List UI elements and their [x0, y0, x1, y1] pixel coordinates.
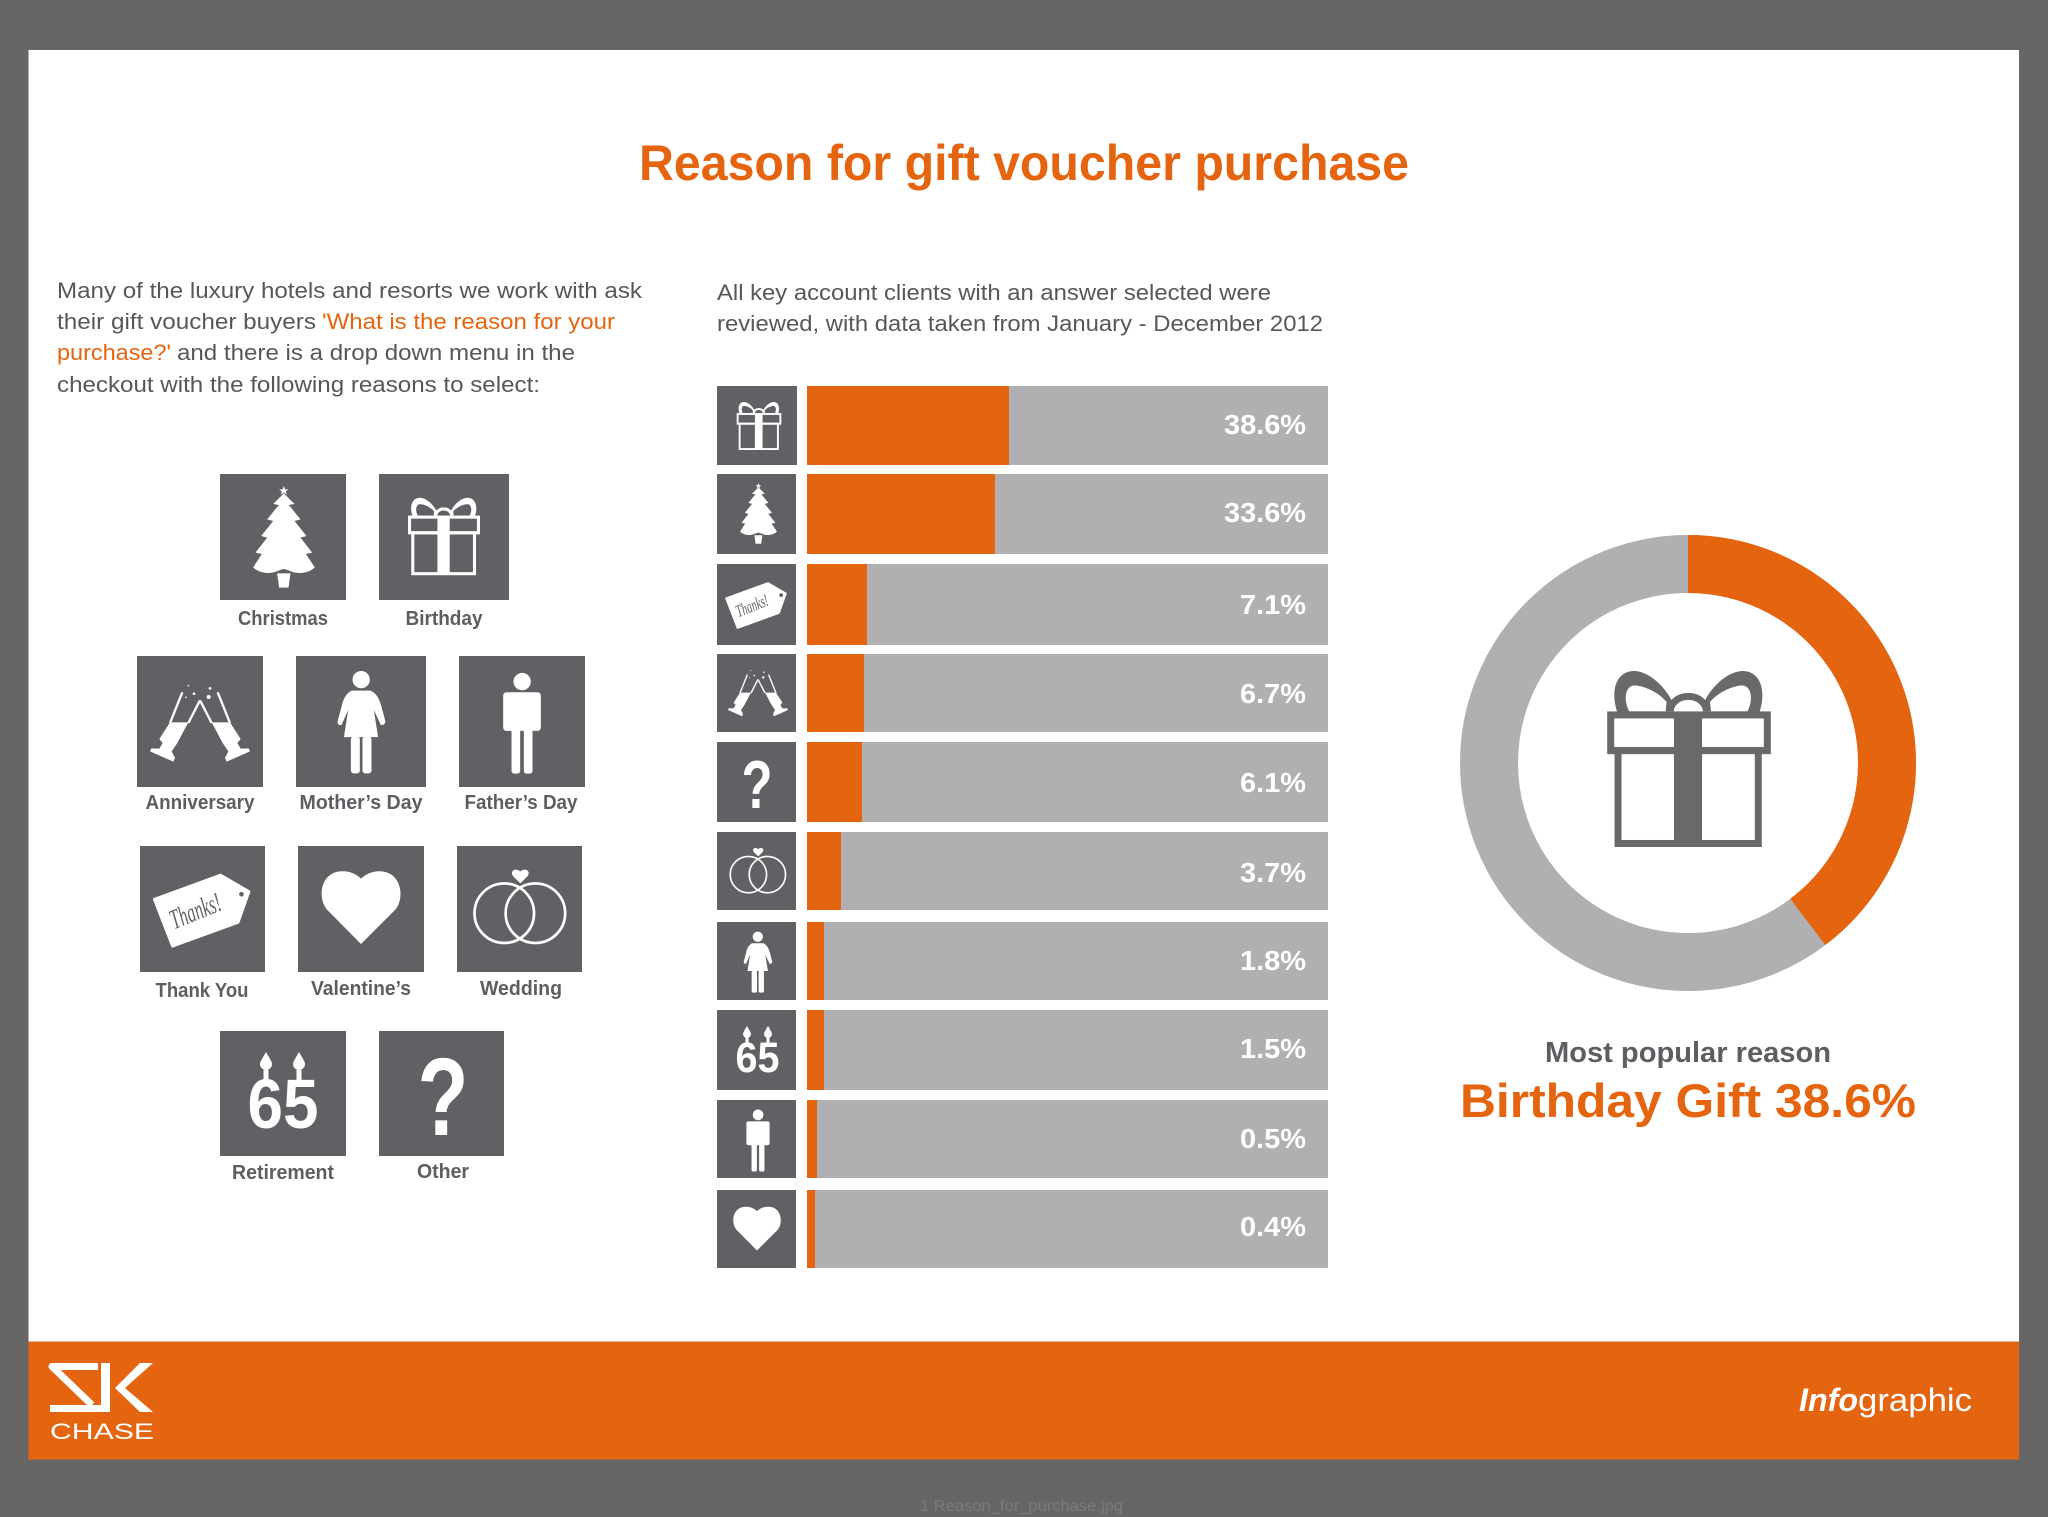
row: Other 6.1%: [717, 742, 1328, 823]
bar chart: [717, 386, 1328, 1268]
icon: gift: [1611, 671, 1767, 845]
icon: Thank You: [140, 846, 265, 1002]
icon: Valentine's: Valentine’s: [311, 978, 411, 1000]
row: Christmas 33.6%: [717, 474, 1328, 554]
row: Other 6.1%: ?: [742, 747, 772, 823]
icon: Birthday: Birthday: [406, 608, 483, 630]
footer label: Infographic: [1799, 1382, 1972, 1418]
callout: most popular reason: Birthday Gift 38.6%: [1460, 1074, 1916, 1127]
callout: most popular reason: [1460, 1037, 1916, 1127]
logo: SK Chase: [50, 1363, 154, 1444]
donut chart: [1489, 564, 1887, 962]
row: Father's Day 0.5%: 0.5%: [1240, 1123, 1306, 1154]
row: Retirement 1.5%: 1.5%: [1240, 1033, 1306, 1064]
intro text block: [57, 278, 643, 397]
row: Other 6.1%: 6.1%: [1240, 767, 1306, 798]
row: Thank You 7.1%: [717, 564, 1328, 645]
row: Birthday 38.6%: [717, 386, 1328, 465]
icon: Christmas: Christmas: [238, 608, 328, 630]
footer label: Infographic: graphic: [1858, 1382, 1972, 1418]
row: Anniversary 6.7%: 6.7%: [1240, 678, 1306, 709]
icon: Valentine's: [298, 846, 424, 1000]
icon: Other: ?: [418, 1036, 468, 1159]
icon: Father's Day: [459, 656, 585, 814]
icon: Anniversary: Anniversary: [146, 792, 255, 814]
icon: Thank You: Thank You: [156, 980, 248, 1002]
method text block: reviewed, with data taken from January - December 2012: [717, 311, 1323, 336]
row: Father's Day 0.5%: [717, 1100, 1328, 1178]
intro text block: Many of the luxury hotels and resorts we work with ask: [57, 278, 643, 303]
callout: most popular reason: Most popular reason: [1545, 1037, 1831, 1069]
row: Christmas 33.6%: 33.6%: [1224, 497, 1306, 528]
panel: reason icon grid: [137, 474, 585, 1184]
icon: Christmas: [220, 474, 346, 630]
intro text block: purchase?': [57, 340, 171, 365]
row: Retirement 1.5%: 65: [736, 1034, 780, 1082]
footer label: Infographic: Info: [1799, 1382, 1858, 1418]
icon: Other: [379, 1031, 504, 1183]
row: Valentine's 0.4%: 0.4%: [1240, 1211, 1306, 1242]
row: Birthday 38.6%: 38.6%: [1224, 409, 1306, 440]
footer band: [28, 1342, 2019, 1460]
row: Mother's Day 1.8%: 1.8%: [1240, 945, 1306, 976]
intro text block: checkout with the following reasons to select:: [57, 372, 540, 397]
intro text block: their gift voucher buyers: [57, 309, 316, 334]
logo: SK Chase: CHASE: [50, 1419, 154, 1444]
row: Wedding 3.7%: [717, 832, 1328, 910]
intro text block: 'What is the reason for your: [322, 309, 616, 334]
row: Retirement 1.5%: [717, 1010, 1328, 1090]
icon: Retirement: Retirement: [232, 1162, 334, 1184]
row: Thank You 7.1%: 7.1%: [1240, 589, 1306, 620]
file name caption: 1 Reason_for_purchase.jpg: [920, 1498, 1123, 1515]
intro text block: and there is a drop down menu in the: [177, 340, 575, 365]
row: Anniversary 6.7%: [717, 654, 1328, 732]
title: Reason for gift voucher purchase: [639, 135, 1409, 191]
icon: Mother's Day: [296, 656, 426, 814]
icon: Mother's Day: Mother’s Day: [300, 792, 423, 814]
icon: Wedding: [457, 846, 582, 1000]
method text block: [717, 280, 1323, 336]
row: Valentine's 0.4%: [717, 1190, 1328, 1268]
icon: Wedding: Wedding: [480, 978, 562, 1000]
icon: Retirement: 65: [248, 1065, 318, 1143]
row: Wedding 3.7%: 3.7%: [1240, 857, 1306, 888]
icon: Father's Day: Father’s Day: [464, 792, 578, 814]
icon: Retirement: [220, 1031, 346, 1184]
row: Mother's Day 1.8%: [717, 922, 1328, 1000]
method text block: All key account clients with an answer selected were: [717, 280, 1271, 305]
icon: Anniversary: [137, 656, 263, 814]
icon: Other: Other: [417, 1161, 469, 1183]
icon: Birthday: [379, 474, 509, 630]
